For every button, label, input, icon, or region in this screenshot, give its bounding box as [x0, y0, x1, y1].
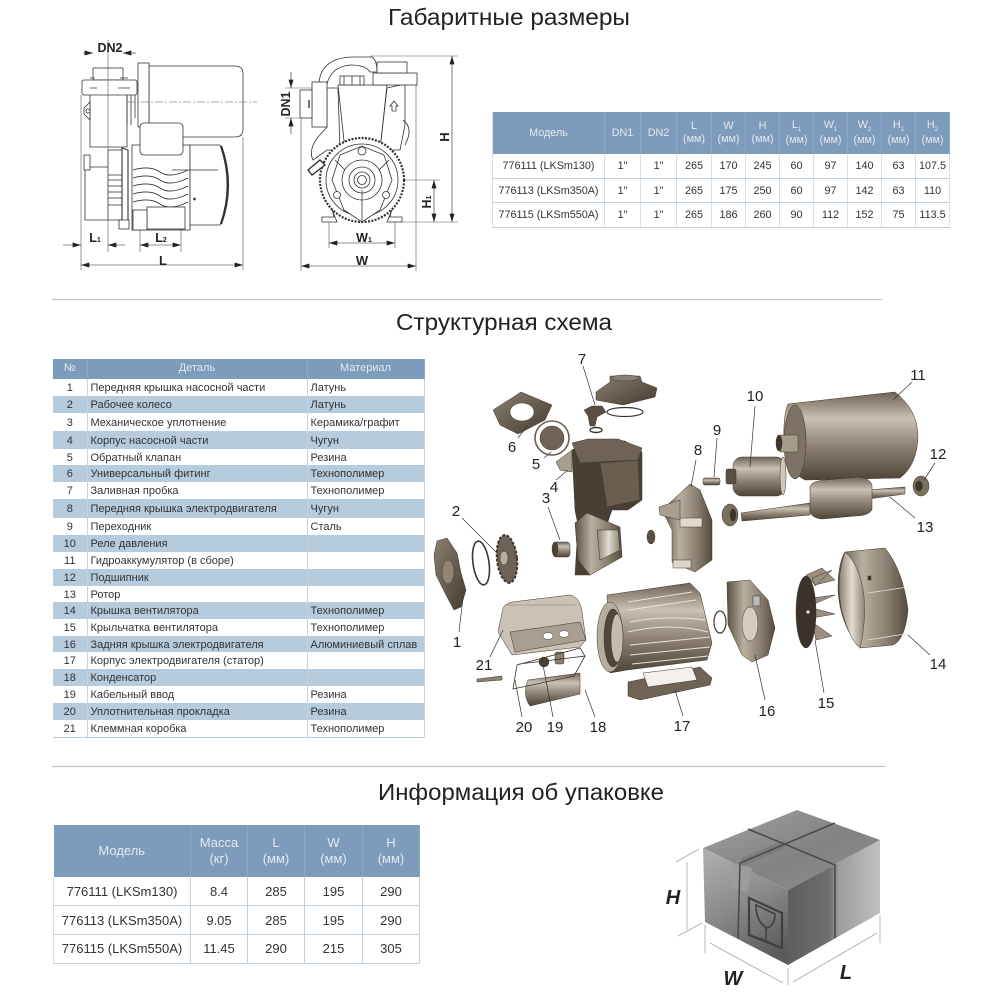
accumulator	[138, 63, 243, 137]
table: parts list: Механическое уплотнение	[90, 416, 226, 428]
table: dimensions: 265	[685, 209, 703, 221]
dimension labels: L1	[89, 231, 101, 245]
table: parts list: 7	[67, 485, 73, 497]
table: parts list: Переходник	[90, 521, 151, 533]
table: parts list: 21	[64, 723, 76, 735]
table: parts list: Резина	[310, 689, 347, 701]
table: parts list: 20	[64, 706, 76, 718]
table: dimensions: 60	[790, 185, 802, 197]
table: dimensions: 776115 (LKSm550A)	[498, 209, 599, 221]
part 7: priming plug and flange	[584, 375, 657, 432]
table: packaging: 776113 (LKSm350A)	[62, 913, 182, 928]
table: parts list: Материал	[340, 362, 391, 374]
table: parts list: Задняя крышка электродвигателя	[90, 638, 264, 650]
part 17: motor housing	[597, 583, 712, 700]
table: dimensions: 112	[822, 209, 839, 221]
table: parts list: 17	[64, 655, 76, 667]
table: dimensions: (мм)	[717, 133, 740, 145]
table: dimensions: (мм)	[887, 134, 910, 146]
part 20: gasket	[513, 648, 585, 689]
leader lines	[459, 366, 935, 717]
table: dimensions: 63	[892, 185, 904, 197]
dimension labels: DN1	[279, 91, 293, 117]
table: packaging: Модель	[98, 843, 145, 858]
part 10: pressure switch	[726, 457, 786, 496]
part 1: pump cover	[434, 538, 466, 610]
table: parts list: Керамика/графит	[310, 416, 400, 428]
table: parts list: Конденсатор	[90, 672, 156, 684]
part numbers: 3	[542, 490, 550, 507]
table: dimensions: 776113 (LKSm350A)	[498, 185, 599, 197]
table: packaging: 776115 (LKSm550A)	[62, 941, 182, 956]
table: dimensions: H2	[927, 119, 938, 133]
table: parts list: Технополимер	[310, 468, 384, 480]
pump body	[311, 62, 417, 160]
table: dimensions: 97	[824, 185, 836, 197]
side view drawing	[82, 63, 243, 230]
table: parts list: Алюминиевый сплав	[310, 638, 417, 650]
table: packaging: (мм)	[378, 851, 404, 866]
table: parts list: Клеммная коробка	[90, 723, 187, 735]
table: parts list: Резина	[310, 706, 347, 718]
part numbers: 7	[578, 351, 586, 368]
part 3: seal	[552, 542, 570, 557]
part numbers: 10	[747, 388, 763, 405]
table: parts list: Латунь	[310, 399, 346, 411]
table: parts list: Чугун	[310, 434, 339, 446]
table: parts list: 10	[64, 538, 76, 550]
part numbers: 5	[532, 456, 540, 473]
table: parts list: 11	[64, 555, 75, 567]
dimension labels: W1	[356, 231, 372, 245]
dimension labels: L	[159, 253, 167, 268]
box dimension labels: H	[666, 887, 681, 909]
table: parts list: Гидроаккумулятор (в сборе)	[90, 555, 234, 567]
table: dimensions: 265	[685, 185, 703, 197]
table: dimensions: Модель	[529, 127, 568, 139]
part 6: fitting	[493, 392, 552, 434]
part numbers: 20	[516, 719, 532, 736]
table: dimensions: 1"	[618, 185, 627, 197]
part numbers: 19	[547, 719, 563, 736]
side fitting	[300, 82, 327, 127]
exploded view parts	[434, 375, 929, 706]
table: dimensions: W1	[824, 119, 837, 133]
table: dimensions: 113.5	[919, 209, 946, 221]
part 18: capacitor	[477, 673, 580, 706]
part numbers: 16	[759, 703, 775, 720]
table: dimensions: 265	[685, 160, 703, 172]
table: packaging: 776111 (LKSm130)	[67, 884, 177, 899]
table: packaging: 290	[380, 913, 402, 928]
table: dimensions: H1	[893, 119, 904, 133]
table: dimensions: 90	[790, 209, 802, 221]
part numbers: 2	[452, 503, 460, 520]
table: packaging: W	[327, 835, 340, 850]
table: dimensions: (мм)	[819, 134, 842, 146]
table: parts list: 13	[64, 588, 76, 600]
motor end	[308, 138, 404, 222]
table: parts list: 12	[64, 572, 76, 584]
table: dimensions: (мм)	[853, 134, 876, 146]
table: dimensions: 60	[790, 160, 802, 172]
table: parts list: Технополимер	[310, 605, 384, 617]
table: packaging: 285	[265, 884, 287, 899]
part 16: rear cover	[727, 580, 775, 662]
title: structural diagram: Структурная схема	[396, 309, 612, 335]
part numbers: 13	[917, 519, 933, 536]
box dimension labels: L	[840, 962, 852, 984]
table: dimensions: 260	[753, 209, 772, 221]
box dimension labels	[666, 887, 852, 990]
table: parts list: Технополимер	[310, 622, 384, 634]
table: packaging: (мм)	[320, 851, 347, 866]
table: parts list: Уплотнительная прокладка	[90, 706, 230, 718]
table: parts list: 6	[67, 468, 73, 480]
table: parts list: Технополимер	[310, 485, 384, 497]
table: parts list: Сталь	[310, 521, 342, 533]
table: parts list: 18	[64, 672, 76, 684]
table: dimensions: 250	[753, 185, 772, 197]
table: dimensions: 107.5	[919, 160, 946, 172]
part numbers: 21	[476, 657, 492, 674]
table: parts list: 4	[67, 434, 73, 446]
table: parts list: Передняя крышка насосной части	[90, 382, 265, 394]
table: parts list: 19	[64, 689, 76, 701]
table: packaging: 9.05	[206, 913, 232, 928]
part 14: fan cover	[838, 548, 908, 648]
table: dimensions: 152	[855, 209, 874, 221]
table: dimensions: (мм)	[785, 134, 808, 146]
table: parts list: Ротор	[90, 588, 120, 600]
part numbers: 11	[910, 367, 926, 384]
table: parts list	[53, 359, 425, 738]
table: dimensions: 1"	[654, 209, 663, 221]
table: parts list: Рабочее колесо	[90, 399, 172, 411]
table: parts list: Чугун	[310, 503, 339, 515]
table: parts list: Кабельный ввод	[90, 689, 174, 701]
table: parts list: №	[64, 362, 76, 374]
dimension lines	[63, 40, 458, 271]
part 15: fan	[796, 568, 835, 648]
part numbers: 17	[674, 718, 690, 735]
table: parts list: 8	[67, 503, 73, 515]
part 4: pump casing	[556, 439, 642, 575]
table: parts list: Технополимер	[310, 723, 384, 735]
part 13: rotor	[722, 477, 905, 526]
title: packaging information: Информация об упаковке	[378, 779, 664, 805]
table: parts list: Передняя крышка электродвигателя	[90, 503, 277, 515]
table: dimensions: L1	[792, 119, 801, 133]
dimension labels: DN2	[97, 41, 123, 55]
table: parts list: 9	[67, 521, 73, 533]
part numbers: 14	[930, 656, 946, 673]
table: dimensions: W2	[858, 119, 871, 133]
table: dimensions: 142	[855, 185, 874, 197]
box dimension labels: W	[724, 968, 745, 990]
box faces	[703, 810, 880, 965]
table: packaging: 215	[323, 941, 344, 956]
small ring	[714, 611, 726, 633]
part 8: motor front cover	[659, 484, 712, 572]
part numbers: 15	[818, 695, 834, 712]
table: dimensions: 245	[753, 160, 772, 172]
table: dimensions: 1"	[618, 160, 627, 172]
table: packaging: 290	[380, 884, 402, 899]
table: parts list: Крыльчатка вентилятора	[90, 622, 218, 634]
table: packaging: 290	[265, 941, 287, 956]
table: parts list: 1	[67, 382, 73, 394]
part 5: check valve	[535, 421, 569, 455]
table: parts list: 3	[67, 416, 73, 428]
table: parts list: 5	[67, 452, 73, 464]
front view drawing	[300, 57, 417, 222]
table: packaging	[53, 825, 420, 964]
fragile mark	[749, 898, 782, 948]
table: packaging: L	[272, 835, 280, 850]
package box illustration	[676, 810, 880, 985]
table: dimensions: 75	[892, 209, 904, 221]
table: dimensions: (мм)	[683, 133, 705, 145]
capacitor box	[133, 123, 185, 230]
part numbers: 18	[590, 719, 606, 736]
divider	[52, 298, 882, 300]
table: parts list: Корпус электродвигателя (статор)	[90, 655, 264, 667]
dimension labels	[89, 41, 452, 268]
table: dimensions: DN1	[612, 127, 633, 139]
table: packaging: (мм)	[263, 851, 289, 866]
outlet arrow	[390, 101, 398, 111]
table: dimensions: 1"	[618, 209, 627, 221]
table: parts list: Подшипник	[90, 572, 149, 584]
part numbers	[452, 351, 946, 736]
part 21: terminal box	[498, 595, 586, 655]
divider	[52, 766, 885, 768]
table: packaging: 195	[323, 884, 344, 899]
table: parts list: Латунь	[310, 382, 346, 394]
priming pipe	[319, 57, 377, 84]
title: overall dimensions: Габаритные размеры	[388, 4, 630, 30]
table: packaging: (кг)	[209, 851, 229, 866]
table: packaging: 285	[265, 913, 287, 928]
part numbers: 6	[508, 439, 516, 456]
table: parts list: 16	[64, 638, 76, 650]
table: packaging: 8.4	[210, 884, 228, 899]
part 9: adapter	[703, 478, 720, 485]
table: dimensions	[492, 112, 950, 228]
small bearing	[647, 530, 655, 544]
table: dimensions: 175	[719, 185, 738, 197]
tape	[732, 823, 835, 938]
motor body	[132, 145, 228, 230]
table: dimensions: (мм)	[921, 134, 944, 146]
table: dimensions: DN2	[648, 127, 669, 139]
table: parts list: Резина	[310, 452, 347, 464]
part numbers: 8	[694, 442, 702, 459]
dimension labels: W	[356, 253, 369, 268]
table: packaging: 195	[323, 913, 344, 928]
dimension labels: H1	[420, 195, 434, 208]
table: parts list: Заливная пробка	[90, 485, 179, 497]
part 2: ring and impeller	[470, 534, 519, 586]
dimension labels: H	[437, 132, 452, 142]
dimension labels: L2	[155, 231, 167, 245]
pump front	[84, 148, 129, 229]
part numbers: 1	[453, 634, 461, 651]
table: parts list: Реле давления	[90, 538, 168, 550]
table: parts list: Деталь	[179, 362, 215, 374]
table: packaging: 11.45	[203, 941, 235, 956]
table: dimensions: 776111 (LKSm130)	[502, 160, 595, 172]
part 11: accumulator	[776, 392, 918, 480]
table: dimensions: L	[691, 120, 697, 132]
table: parts list: Универсальный фитинг	[90, 468, 211, 480]
table: parts list: 15	[64, 622, 76, 634]
part numbers: 9	[713, 422, 721, 439]
table: parts list: 2	[67, 399, 73, 411]
box dimension lines	[676, 849, 880, 985]
table: dimensions: 97	[824, 160, 836, 172]
table: dimensions: 1"	[654, 160, 663, 172]
table: dimensions: 110	[924, 185, 941, 197]
table: parts list: 14	[64, 605, 76, 617]
table: dimensions: W	[723, 120, 734, 132]
table: parts list: Корпус насосной части	[90, 434, 208, 446]
table: dimensions: 170	[719, 160, 738, 172]
part 12: bearing	[913, 476, 929, 496]
part 19: cable gland	[539, 652, 564, 667]
table: parts list: Обратный клапан	[90, 452, 181, 464]
pump neck and flange	[82, 68, 137, 147]
table: parts list: Крышка вентилятора	[90, 605, 199, 617]
table: dimensions: 186	[719, 209, 738, 221]
part numbers: 12	[930, 446, 946, 463]
table: dimensions: (мм)	[751, 133, 774, 145]
table: packaging: H	[386, 835, 396, 850]
table: packaging: 305	[380, 941, 402, 956]
table: packaging: Масса	[200, 835, 238, 850]
table: dimensions: H	[759, 120, 766, 132]
table: dimensions: 140	[855, 160, 874, 172]
table: dimensions: 1"	[654, 185, 663, 197]
part numbers: 4	[550, 479, 558, 496]
table: dimensions: 63	[892, 160, 904, 172]
